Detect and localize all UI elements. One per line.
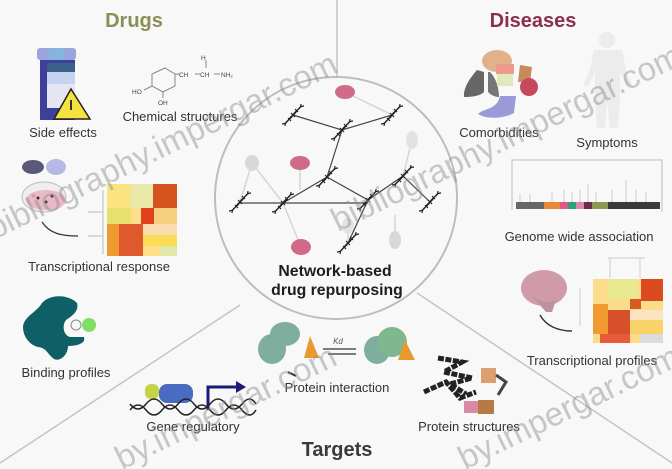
heatmap: transcriptional profiles: [580, 258, 663, 343]
label: comorbidities: Comorbidities: [459, 125, 539, 140]
icon: protein interaction: Kd: [333, 337, 343, 346]
circle label: network-based drug repurposing: Network-based: [278, 263, 392, 280]
chart: genome wide association: [512, 160, 662, 212]
icon: protein structures: [424, 358, 506, 414]
label: binding profiles: Binding profiles: [22, 365, 111, 380]
label: side effects: Side effects: [29, 125, 97, 140]
heatmap: transcriptional response: [88, 184, 177, 256]
title: Diseases: Diseases: [490, 10, 576, 32]
icon: gene regulatory DNA with activator: [130, 381, 256, 415]
chemical structure: NH₂: [221, 72, 233, 79]
icon: binding profile protein: [23, 296, 96, 360]
network circle: [215, 77, 457, 319]
icon: petri dish: [22, 182, 66, 212]
label: genome wide association: Genome wide association: [505, 229, 653, 244]
label: symptoms: Symptoms: [576, 135, 638, 150]
icon: brain: [521, 270, 567, 312]
arrow: dish to heatmap: [42, 222, 78, 236]
circle label: network-based drug repurposing: [271, 263, 403, 299]
network diagram: [229, 85, 441, 255]
icon: human body silhouette: [583, 32, 632, 128]
chemical structure: HO: [132, 89, 142, 96]
label: chemical structures: Chemical structures: [123, 109, 238, 124]
title: Targets: Targets: [302, 439, 372, 461]
icon: comorbidity organs: [464, 50, 538, 118]
icon: protein interaction: [258, 322, 415, 376]
label: protein interaction: Protein interaction: [285, 380, 389, 395]
label: transcriptional response: Transcriptional response: [28, 259, 170, 274]
title: Drugs: Drugs: [105, 10, 163, 32]
label: transcriptional profiles: Transcriptional profiles: [527, 353, 658, 368]
icon: pills: [22, 159, 66, 175]
chemical structure: H: [201, 55, 206, 62]
icon: side effects bottle: [37, 48, 90, 120]
chemical structure: CH: [179, 72, 189, 79]
label: protein structures: Protein structures: [418, 419, 520, 434]
arrow: brain to heatmap: [540, 315, 572, 331]
chemical structure: CH: [200, 72, 210, 79]
chemical structure: OH: [158, 100, 168, 107]
chemical structure: [132, 55, 233, 107]
circle label: network-based drug repurposing: drug repurposing: [271, 282, 403, 299]
label: gene regulatory: Gene regulatory: [146, 419, 240, 434]
